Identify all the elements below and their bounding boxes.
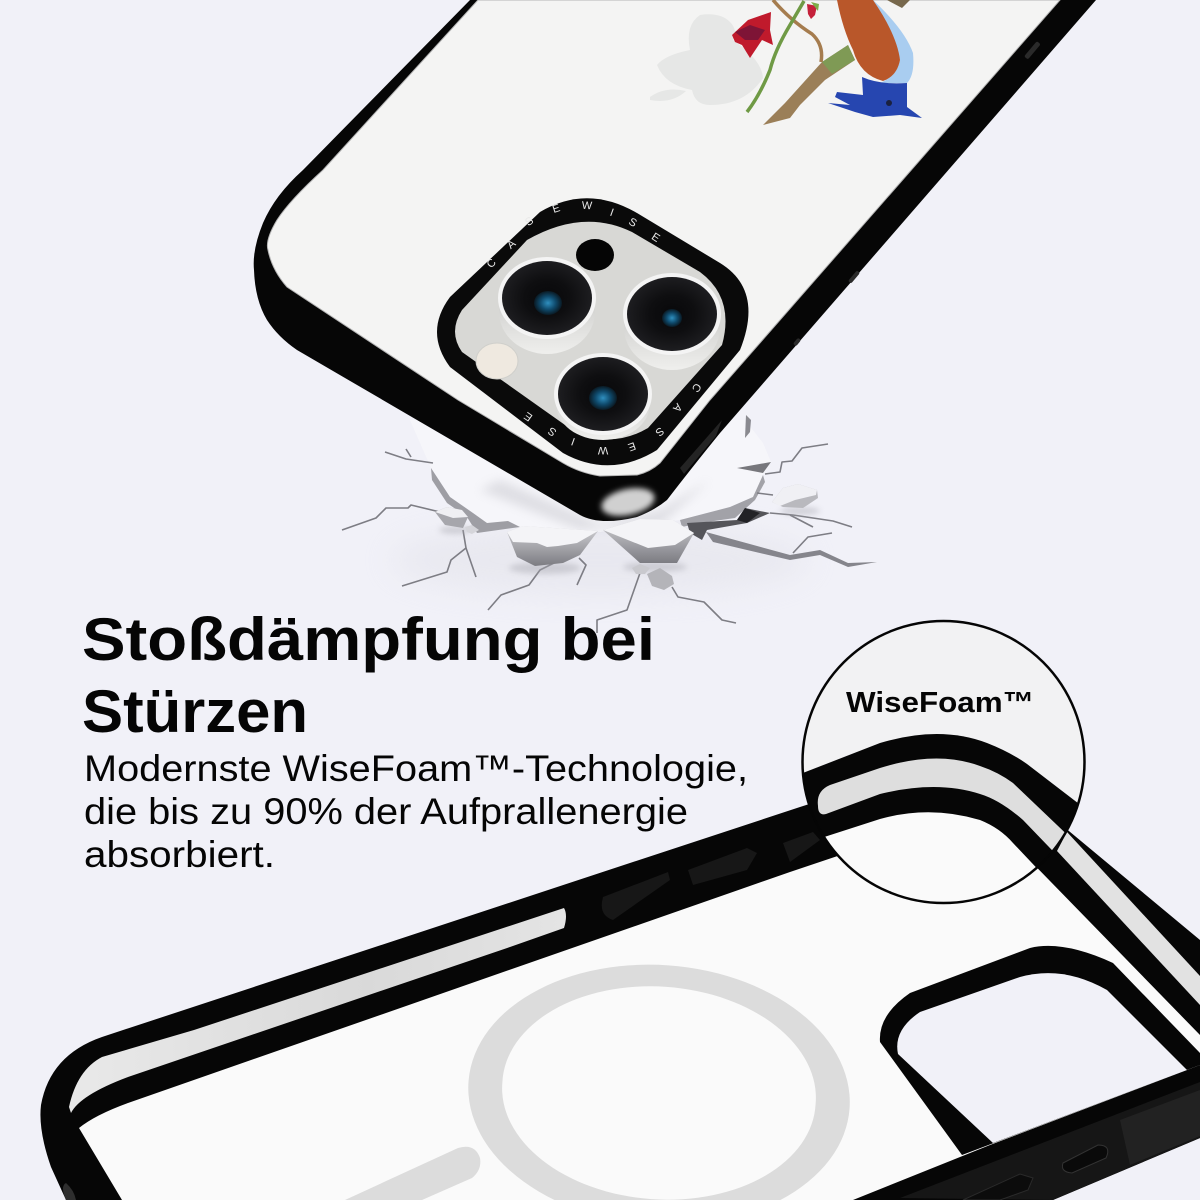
lens: top left [498,257,596,354]
phone contact shadow [480,480,710,530]
cracked plate shadow [390,525,810,595]
brand lettering: C [689,381,703,394]
bumper glossy highlight and sheen [599,420,722,520]
microphone [576,239,614,271]
clear back panel [79,827,1200,1200]
brand lettering: E [522,409,535,423]
artwork: bird and branch [732,0,922,125]
body text: die bis zu 90% der Aufprallenergie [84,791,688,832]
magsafe pill [345,1147,480,1200]
body text: Modernste WiseFoam™-Technologie, [84,748,748,789]
brand lettering: S [653,424,666,438]
side buttons [602,832,820,920]
foam strip left [69,908,566,1113]
dark hole [687,508,770,540]
rock middle left [507,526,598,566]
camera plate [455,222,726,439]
rock bottom [632,564,674,590]
brand lettering: I [608,207,615,219]
magnified bumper [804,734,1078,867]
flash [476,343,518,379]
brand lettering: E [626,439,637,453]
brand lettering [485,200,703,456]
bumper frame [40,766,1200,1200]
brand lettering: E [551,202,562,216]
phone: bottom case interior [40,766,1200,1200]
side notches [793,41,1041,346]
camera cutout frame [880,946,1200,1155]
crack lines [342,444,852,633]
camera bump [437,198,748,465]
rock right [772,484,818,508]
brand lettering: W [597,444,608,456]
rock shadows [439,507,820,574]
brand lettering: A [670,401,684,415]
phone: top case back view [254,0,1096,521]
lens: bottom [554,353,652,440]
back panel [267,0,1060,476]
artwork: apple logo shadow [657,14,763,105]
rock left small [435,507,468,528]
foam strip right [1057,832,1200,1005]
camera cutout [897,973,1187,1143]
callout: WiseFoam magnifier [801,620,1086,904]
long wedge crack [706,532,877,567]
brand lettering: C [485,257,499,271]
lifted plate [410,420,771,532]
brand lettering: W [581,200,593,212]
plate left rim [431,468,520,533]
brand lettering: S [626,216,639,230]
brand lettering: S [523,215,536,229]
callout label: WiseFoam™ [846,687,1034,719]
brand lettering: A [505,237,519,252]
rock middle right [603,519,694,563]
bumper [254,0,1096,521]
bottom edge details [63,1082,1200,1200]
heading: Stürzen [82,678,308,745]
brand lettering: E [649,231,662,245]
plate right rim [680,475,765,527]
heading: Stoßdämpfung bei [82,606,655,673]
brand lettering: I [570,435,577,447]
artwork: apple leaf [650,89,686,101]
brand lettering: S [546,424,559,438]
lens: right [623,273,721,370]
wedge chip [737,462,771,473]
body text: absorbiert. [84,834,275,875]
rock left tiny [465,525,479,534]
illustration: cracked ground [342,415,877,633]
magsafe ring [468,965,850,1200]
